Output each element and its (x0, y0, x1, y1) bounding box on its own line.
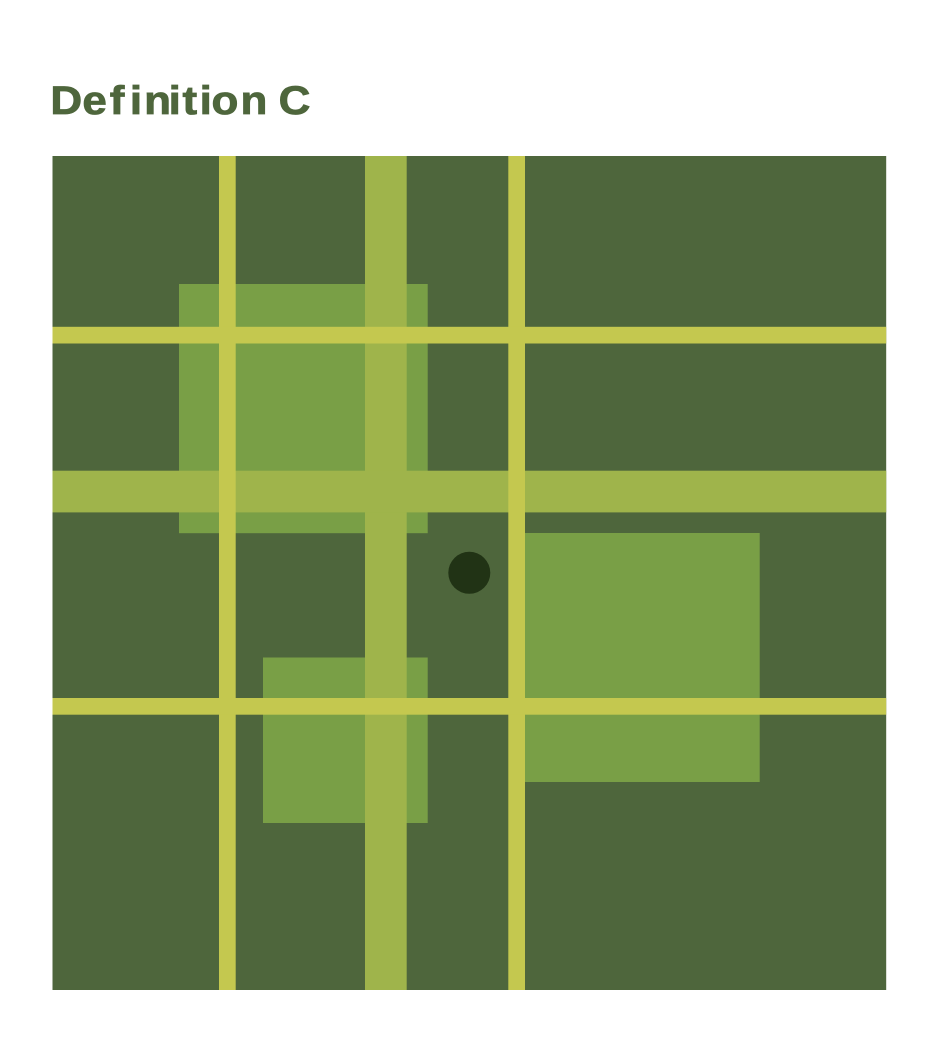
narrow vertical road: right (508, 156, 525, 990)
narrow horizontal road: bottom (52, 698, 886, 715)
location point (448, 552, 490, 594)
map background (52, 156, 886, 990)
wide vertical road (365, 156, 407, 990)
green block: upper left (179, 284, 428, 533)
green block: right (511, 533, 760, 782)
title: Definition C (50, 78, 310, 123)
narrow vertical road: left (219, 156, 236, 990)
green block: lower left (263, 658, 428, 823)
narrow horizontal road: top (52, 327, 886, 344)
wide horizontal road (52, 471, 886, 512)
